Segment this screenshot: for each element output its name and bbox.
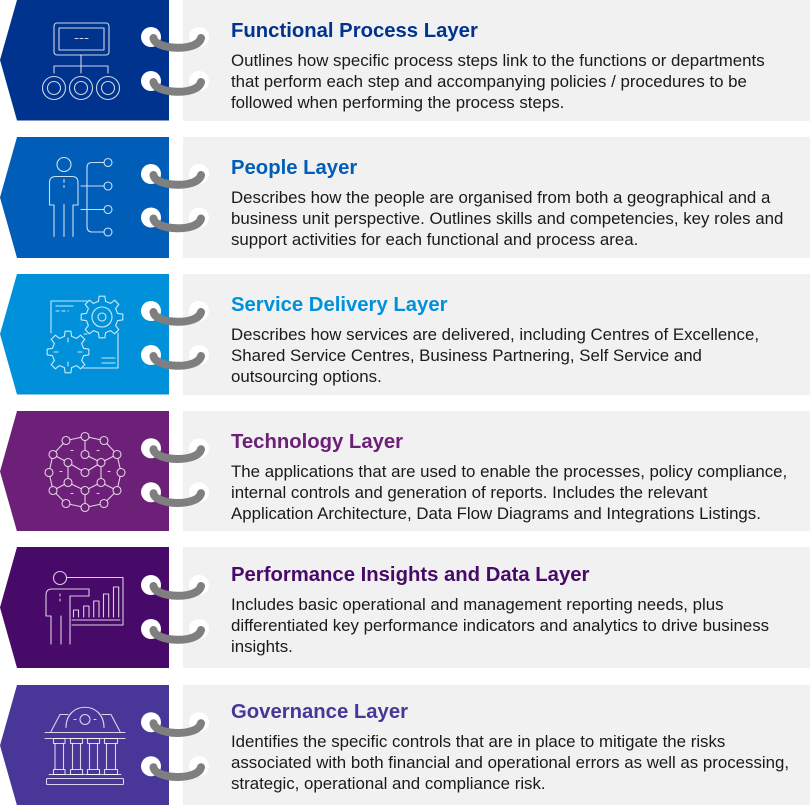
text block xyxy=(231,462,787,522)
text block: strategic, operational and compliance risk. xyxy=(231,774,546,792)
heading: Governance Layer xyxy=(231,700,408,722)
tag with icon and rings xyxy=(0,411,209,531)
text block: Shared Service Centres, Business Partnering, Self Service and xyxy=(231,346,702,365)
text block xyxy=(231,188,783,248)
text block: insights. xyxy=(231,637,293,656)
tag with icon and rings xyxy=(0,547,209,668)
text block xyxy=(231,595,769,656)
binder rings xyxy=(141,27,209,92)
text block: The applications that are used to enable the processes, policy compliance, xyxy=(231,462,787,480)
binder rings xyxy=(141,575,209,640)
heading: Performance Insights and Data Layer xyxy=(231,564,589,586)
description card background xyxy=(183,136,810,258)
text block: support activities for each functional and process area. xyxy=(231,230,638,248)
panel: service delivery layer xyxy=(0,274,810,395)
text block: business unit perspective. Outlines skills and competencies, key roles and xyxy=(231,208,783,228)
text block: Describes how services are delivered, including Centres of Excellence, xyxy=(231,325,759,344)
tag with icon and rings xyxy=(0,0,209,120)
panel: performance insights and data layer xyxy=(0,547,810,668)
icon: presenter with bar chart xyxy=(46,572,123,644)
text block xyxy=(231,325,759,386)
text block: Outlines how specific process steps link to the functions or departments xyxy=(231,51,765,70)
heading: People Layer xyxy=(231,156,357,178)
text block: internal controls and generation of reports. Includes the relevant xyxy=(231,482,708,502)
text block: Includes basic operational and management reporting needs, plus xyxy=(231,595,724,614)
text block xyxy=(231,51,765,112)
text block: Describes how the people are organised from both a geographical and a xyxy=(231,188,770,206)
panel: people layer xyxy=(0,137,810,258)
text block: that perform each step and accompanying policies / procedures to be xyxy=(231,72,747,91)
heading: Service Delivery Layer xyxy=(231,294,448,316)
heading: Functional Process Layer xyxy=(231,20,478,42)
panel: functional process layer xyxy=(0,0,810,121)
description card background xyxy=(183,547,810,668)
description card background xyxy=(183,274,810,394)
description card background xyxy=(183,0,810,120)
panel: technology layer xyxy=(0,411,810,531)
binder rings xyxy=(141,438,209,502)
icon: gears and window xyxy=(47,296,123,373)
icon: classical building xyxy=(45,707,125,784)
icon: person with connections xyxy=(50,157,112,236)
text block: Identifies the specific controls that are in place to mitigate the risks xyxy=(231,732,725,750)
icon: org chart xyxy=(42,23,120,100)
binder rings xyxy=(141,164,209,228)
text block xyxy=(231,732,789,792)
text block: differentiated key performance indicators and analytics to drive business xyxy=(231,616,769,635)
icon: network sphere xyxy=(45,432,125,511)
binder rings xyxy=(141,712,209,776)
heading: Technology Layer xyxy=(231,430,403,452)
description card background xyxy=(183,684,810,805)
tag with icon and rings xyxy=(0,274,209,394)
panel: governance layer xyxy=(0,685,810,805)
text block: associated with both financial and operational errors as well as processing, xyxy=(231,752,789,772)
tag with icon and rings xyxy=(0,137,209,258)
text block: outsourcing options. xyxy=(231,367,382,386)
text block: followed when performing the process steps. xyxy=(231,93,564,112)
text block: Application Architecture, Data Flow Diagrams and Integrations Listings. xyxy=(231,504,761,522)
description card background xyxy=(183,410,810,531)
binder rings xyxy=(141,301,209,366)
tag with icon and rings xyxy=(0,685,209,805)
